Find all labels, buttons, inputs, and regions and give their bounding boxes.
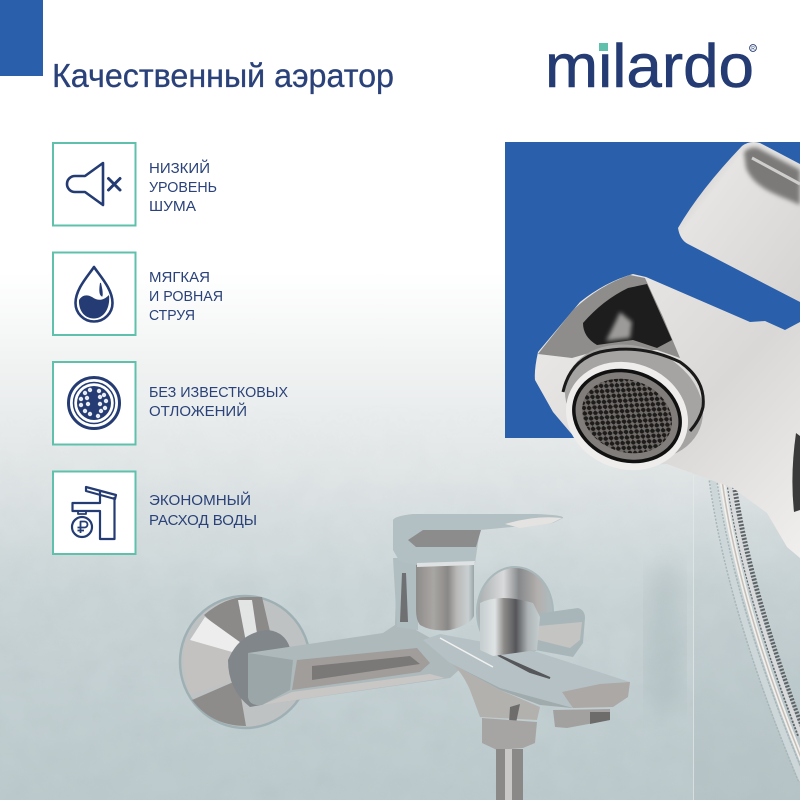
column behind cylinder bbox=[393, 558, 418, 630]
bezel dark arc bbox=[563, 349, 703, 431]
spout body bbox=[535, 274, 800, 558]
chrome cap: light part bbox=[538, 275, 680, 358]
bezel body bbox=[548, 324, 720, 480]
rear wall plate bbox=[477, 567, 553, 657]
label: no limescale bbox=[149, 384, 288, 420]
label: no limescale: БЕЗ ИЗВЕСТКОВЫХ bbox=[149, 384, 288, 401]
icon: muted speaker bbox=[67, 163, 120, 205]
lower spout underside bbox=[450, 660, 572, 708]
label: economical water use: ЭКОНОМНЫЙ bbox=[149, 491, 251, 509]
label: low noise: НИЗКИЙ bbox=[149, 159, 210, 177]
icon frame: speaker bbox=[53, 143, 136, 226]
label: soft stream: И РОВНАЯ bbox=[149, 288, 223, 305]
left nipple bbox=[228, 630, 290, 707]
close-up: faucet spout with aerator bbox=[535, 274, 800, 558]
hose connector bbox=[496, 749, 523, 800]
close-up: faucet lever bbox=[678, 142, 800, 302]
background: concrete wall fading to white bbox=[0, 324, 800, 800]
label: economical water use bbox=[149, 491, 257, 529]
icon: aerator mesh bbox=[68, 378, 120, 428]
aerator grey ring bbox=[563, 358, 691, 474]
title: Качественный аэратор bbox=[52, 57, 394, 94]
icon: water drop bbox=[76, 267, 112, 322]
small aerator bbox=[553, 709, 610, 728]
aerator black ring bbox=[559, 354, 695, 478]
logo: milardo: R bbox=[751, 46, 755, 52]
label: soft stream: МЯГКАЯ bbox=[149, 269, 210, 286]
label: no limescale: ОТЛОЖЕНИЙ bbox=[149, 402, 247, 420]
panel: no limescale bbox=[53, 362, 288, 444]
icon: faucet and ruble coin bbox=[72, 487, 116, 539]
central cylinder bbox=[416, 545, 474, 630]
panel: soft stream bbox=[53, 252, 223, 335]
coupling nut bbox=[482, 718, 537, 750]
logo: milardo: milardo bbox=[545, 32, 754, 100]
aerator mesh bbox=[571, 366, 683, 466]
diverter knob bbox=[480, 598, 540, 656]
shower hose bbox=[713, 480, 800, 780]
left wall plate bbox=[180, 596, 310, 728]
spout right dark fitting bbox=[792, 433, 800, 512]
panel: economical water use bbox=[53, 472, 257, 554]
product: bath mixer bbox=[180, 514, 630, 800]
label: low noise: УРОВЕНЬ bbox=[149, 179, 217, 196]
chrome cap: dark reflection bbox=[583, 284, 672, 348]
aerator white ring bbox=[551, 345, 703, 487]
label: soft stream: СТРУЯ bbox=[149, 307, 195, 324]
label: economical water use: РАСХОД ВОДЫ bbox=[149, 512, 257, 529]
panel: low noise bbox=[53, 143, 217, 226]
label: low noise bbox=[149, 159, 217, 215]
blue panel behind close-up bbox=[505, 142, 800, 438]
icon frame: aerator bbox=[53, 362, 136, 444]
icon frame: faucet bbox=[53, 472, 136, 554]
lower coupling body bbox=[452, 664, 540, 723]
mixer handle bbox=[393, 514, 563, 567]
bath spout bbox=[423, 634, 630, 708]
rear lever bbox=[535, 608, 585, 657]
label: soft stream bbox=[149, 269, 223, 324]
icon frame: drop bbox=[53, 252, 136, 335]
corner accent block bbox=[0, 0, 43, 76]
horizontal arm bbox=[248, 560, 470, 705]
chrome cap: highlight bbox=[606, 312, 632, 341]
label: low noise: ШУМА bbox=[149, 198, 196, 215]
